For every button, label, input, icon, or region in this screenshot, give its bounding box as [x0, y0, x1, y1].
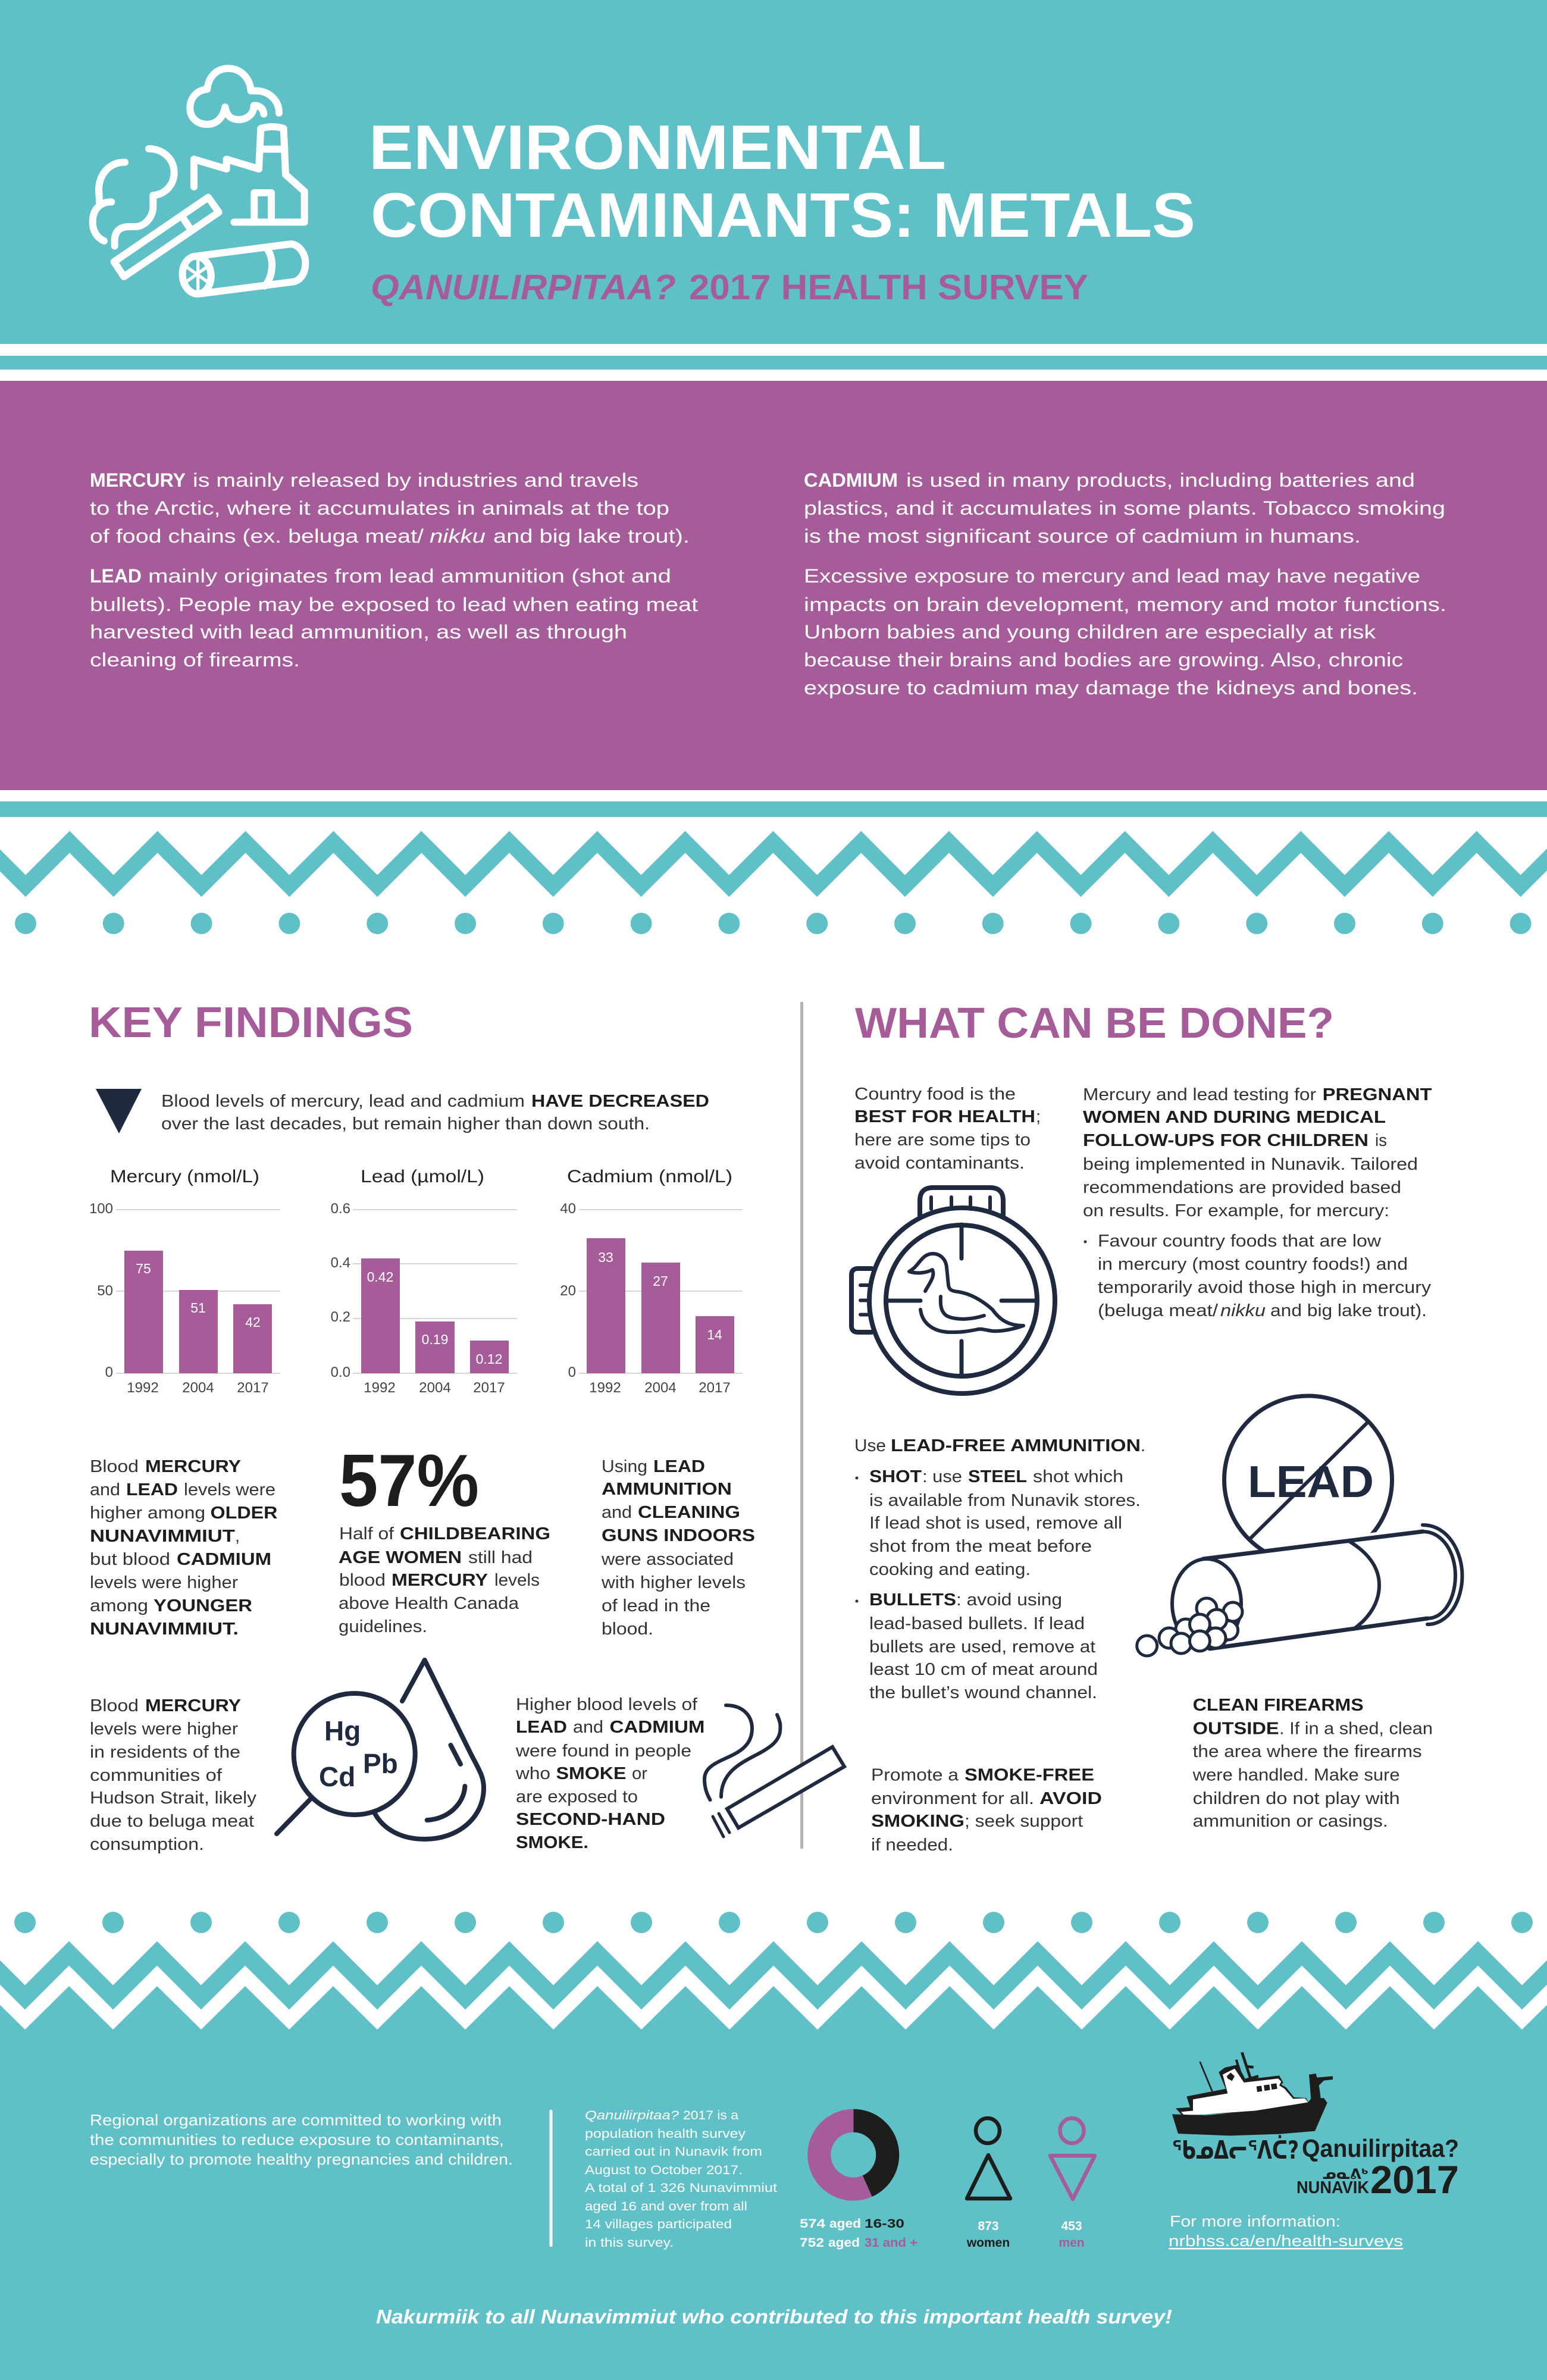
bar chart: mercury: 2017: [237, 1380, 269, 1396]
text: childbearing age women: blood: [339, 1571, 386, 1590]
text: childbearing age women: MERCURY: [392, 1571, 488, 1590]
text: age differences: levels were: [184, 1480, 275, 1499]
text: lead ammunition: with higher levels: [601, 1573, 746, 1592]
text: Hudson Strait: Blood: [90, 1696, 139, 1715]
text: Hudson Strait: consumption.: [90, 1835, 204, 1854]
text: survey description: A total of 1 326 Nunavimmiut: [585, 2181, 777, 2195]
heading: what can be done: WHAT CAN BE DONE?: [855, 1000, 1334, 1047]
text: survey description: Qanuilirpitaa?: [585, 2109, 679, 2122]
counts: women and men: men: [1059, 2236, 1085, 2250]
icon: blood drop with magnifier: [277, 1660, 484, 1839]
text: testing: [1083, 1085, 1432, 1320]
intro text: left column: mainly originates from lead ammunition (shot and: [148, 565, 671, 587]
text: lead ammunition: [601, 1457, 755, 1639]
text: smoking: Higher blood levels of: [516, 1695, 698, 1714]
title: CONTAMINANTS: METALS: [371, 180, 1195, 250]
text: smoking: SMOKE: [556, 1764, 626, 1783]
bar chart: cadmium: 33: [598, 1250, 613, 1265]
text: lead-free ammunition: is available from Nunavik stores.: [869, 1491, 1141, 1510]
bar chart: cadmium: 40: [560, 1201, 576, 1217]
intro text: left column: harvested with lead ammunition, as well as through: [90, 621, 627, 643]
intro text: left column: MERCURY: [90, 469, 186, 491]
text: lead-free ammunition: If lead shot is used, remove all: [869, 1514, 1122, 1533]
bar chart: cadmium: 2004: [644, 1380, 677, 1396]
text: survey description: August to October 2017.: [585, 2163, 743, 2177]
donut legend: 574: [800, 2217, 825, 2231]
text: country food: Country food is the: [854, 1085, 1016, 1104]
text: smoke-free: if needed.: [871, 1836, 953, 1855]
text: lead-free ammunition: [854, 1436, 1145, 1702]
text: clean firearms: the area where the firearms: [1193, 1742, 1422, 1761]
text: age differences: ,: [235, 1527, 240, 1546]
more information link: nrbhss.ca/en/health-surveys: [1169, 2232, 1403, 2250]
intro text: left column: of food chains (ex. beluga meat/: [90, 525, 424, 547]
bar chart: lead: 0.4: [331, 1255, 350, 1271]
bar chart: lead: 2004: [419, 1380, 451, 1396]
intro text: right column: exposure to cadmium may damage the kidneys and bones.: [804, 677, 1418, 699]
decreased statement: over the last decades, but remain higher than down south.: [161, 1114, 650, 1133]
big number: 57%: 57%: [339, 1440, 479, 1522]
text: lead ammunition: LEAD: [653, 1457, 705, 1476]
text: testing: and big lake trout).: [1270, 1301, 1427, 1320]
bar chart: mercury: [89, 1167, 280, 1396]
subtitle: [371, 268, 1088, 307]
icon: downward triangle: [96, 1089, 142, 1133]
text: regional organizations: the communities to reduce exposure to contaminants,: [90, 2131, 504, 2149]
text: survey description: [585, 2109, 777, 2250]
donut legend: 16-30: [865, 2217, 904, 2231]
icon: no lead with shotgun shell: [1137, 1396, 1463, 1656]
icon: smoking cigarette: [704, 1705, 844, 1837]
logo: Qanuilirpitaa 2017: ᖃᓄᐃᓕᕐᐱᑖ?: [1172, 2135, 1299, 2165]
decreased statement: HAVE DECREASED: [531, 1092, 709, 1111]
text: smoke-free: SMOKE-FREE: [964, 1766, 1094, 1785]
text: Hudson Strait: MERCURY: [145, 1696, 241, 1715]
text: survey description: 14 villages participated: [585, 2218, 732, 2231]
bar chart: cadmium: Cadmium (nmol/L): [567, 1167, 732, 1186]
donut legend: aged: [829, 2217, 861, 2231]
counts: women and men: 873: [978, 2219, 999, 2233]
bar chart: lead: 2017: [473, 1380, 505, 1396]
text: lead ammunition: were associated: [601, 1550, 734, 1569]
text: age differences: OLDER: [211, 1504, 278, 1523]
text: lead ammunition: AMMUNITION: [602, 1480, 732, 1499]
text: testing: recommendations are provided based: [1083, 1178, 1401, 1197]
text: age differences: levels were higher: [90, 1573, 238, 1592]
bar chart: mercury: 100: [89, 1201, 113, 1217]
text: lead-free ammunition: Use: [854, 1436, 886, 1455]
intro text: right column: because their brains and bodies are growing. Also, chronic: [804, 649, 1403, 671]
donut legend: aged: [828, 2236, 860, 2250]
text: survey description: aged 16 and over from all: [585, 2200, 747, 2213]
subtitle: 2017 HEALTH SURVEY: [689, 268, 1088, 307]
bar chart: mercury: Mercury (nmol/L): [110, 1167, 259, 1186]
text: regional organizations: especially to promote healthy pregnancies and children.: [90, 2150, 513, 2168]
icon: women: [967, 2118, 1010, 2199]
text: regional organizations: Regional organizations are committed to working with: [90, 2111, 502, 2129]
text: lead-free ammunition: STEEL: [968, 1467, 1027, 1486]
text: lead-free ammunition: SHOT: [869, 1467, 922, 1486]
bar chart: cadmium: 27: [653, 1273, 668, 1289]
text: age differences: Blood: [90, 1457, 139, 1476]
text: smoking: SMOKE.: [516, 1833, 588, 1852]
bar chart: mercury: 1992: [127, 1380, 159, 1396]
text: smoking: are exposed to: [516, 1787, 638, 1806]
intro text: right column: is the most significant source of cadmium in humans.: [804, 525, 1361, 547]
text: Hudson Strait: communities of: [90, 1766, 223, 1785]
text: survey description: carried out in Nunavik from: [585, 2145, 762, 2159]
header band: [0, 0, 1547, 344]
text: testing: in mercury (most country foods!) and: [1098, 1255, 1408, 1274]
counts: women and men: 453: [1061, 2219, 1082, 2233]
donut chart: age groups: [819, 2121, 888, 2189]
icon: blood drop with magnifier: Pb: [363, 1748, 398, 1779]
intro text: right column: [804, 469, 1446, 699]
intro text: right column: CADMIUM: [804, 469, 898, 491]
text: age differences: [90, 1457, 278, 1639]
text: testing: on results. For example, for mercury:: [1083, 1201, 1389, 1220]
text: clean firearms: CLEAN FIREARMS: [1193, 1696, 1364, 1715]
text: childbearing age women: still had: [468, 1548, 533, 1567]
text: childbearing age women: Half of: [339, 1524, 394, 1543]
text: lead ammunition: CLEANING: [638, 1503, 740, 1522]
bar chart: lead: 0.42: [367, 1269, 393, 1285]
decreased statement: Blood levels of mercury, lead and cadmium: [161, 1092, 525, 1111]
bar chart: mercury: 0: [105, 1364, 113, 1380]
text: clean firearms: . If in a shed, clean: [1279, 1720, 1433, 1739]
intro text: left column: nikku: [430, 525, 486, 547]
text: testing: WOMEN AND DURING MEDICAL: [1083, 1108, 1386, 1127]
text: country food: BEST FOR HEALTH: [854, 1107, 1035, 1126]
text: childbearing age women: [339, 1524, 550, 1636]
icon: men: [1050, 2118, 1095, 2199]
text: lead ammunition: of lead in the: [602, 1596, 710, 1615]
icon: blood drop with magnifier: Hg: [324, 1715, 361, 1746]
donut legend: 752: [800, 2236, 824, 2250]
intro text: right column: is used in many products, including batteries and: [906, 469, 1415, 491]
text: Hudson Strait: in residents of the: [90, 1743, 240, 1762]
intro text: left column: is mainly released by industries and travels: [193, 469, 638, 491]
text: childbearing age women: guidelines.: [339, 1617, 427, 1636]
title: ENVIRONMENTAL: [369, 112, 946, 183]
panel: intro: [0, 381, 1547, 790]
text: lead-free ammunition: cooking and eating.: [869, 1560, 1031, 1579]
logo: Qanuilirpitaa 2017: [1172, 2134, 1459, 2202]
text: Hudson Strait: [90, 1696, 257, 1854]
text: smoking: who: [515, 1764, 550, 1783]
bar chart: lead: 0.0: [331, 1364, 350, 1380]
icon: rifle scope with duck: [851, 1188, 1055, 1393]
header icon: smoke, factory, cigarette, shotgun shell: [93, 68, 305, 295]
bar chart: mercury: 50: [97, 1283, 113, 1299]
text: survey description: in this survey.: [585, 2236, 674, 2250]
text: testing: temporarily avoid those high in mercury: [1098, 1278, 1432, 1297]
text: testing: FOLLOW-UPS FOR CHILDREN: [1083, 1131, 1368, 1150]
counts: women and men: [966, 2219, 1085, 2250]
text: Hudson Strait: levels were higher: [90, 1720, 238, 1739]
text: testing: Mercury and lead testing for: [1083, 1085, 1316, 1104]
text: age differences: YOUNGER: [154, 1596, 252, 1615]
text: country food: ;: [1036, 1107, 1041, 1126]
decreased statement: [161, 1092, 709, 1133]
bar chart: cadmium: [560, 1167, 743, 1396]
text: testing: is: [1375, 1131, 1387, 1150]
intro text: left column: LEAD: [90, 565, 142, 587]
text: smoke-free: SMOKING: [871, 1812, 964, 1831]
intro text: left column: bullets). People may be exposed to lead when eating meat: [90, 594, 698, 615]
intro text: left column: to the Arctic, where it accumulates in animals at the top: [90, 497, 669, 519]
bar chart: cadmium: 20: [560, 1283, 576, 1299]
text: survey description: population health survey: [585, 2127, 746, 2141]
logo: Qanuilirpitaa 2017: NUNAVIK: [1297, 2178, 1369, 2197]
text: lead-free ammunition: least 10 cm of meat around: [869, 1660, 1098, 1679]
bar chart: lead: 0.2: [331, 1309, 350, 1325]
text: smoking: or: [632, 1764, 647, 1783]
logo: Qanuilirpitaa 2017: 2017: [1370, 2157, 1459, 2202]
text: testing: being implemented in Nunavik. Tailored: [1083, 1155, 1418, 1174]
intro text: left column: cleaning of firearms.: [90, 649, 300, 671]
more information link: [1169, 2212, 1403, 2250]
bar chart: cadmium: 0: [568, 1364, 576, 1380]
text: smoke-free: [871, 1766, 1102, 1855]
text: clean firearms: ammunition or casings.: [1193, 1812, 1388, 1831]
text: smoke-free: AVOID: [1039, 1789, 1102, 1808]
counts: women and men: women: [966, 2236, 1010, 2250]
bar chart: cadmium: 2017: [699, 1380, 731, 1396]
text: testing: Favour country foods that are low: [1098, 1232, 1382, 1251]
text: childbearing age women: levels: [494, 1571, 540, 1590]
text: lead-free ammunition: the bullet’s wound channel.: [869, 1683, 1097, 1702]
text: lead-free ammunition: : avoid using: [956, 1590, 1062, 1609]
text: lead-free ammunition: BULLETS: [869, 1590, 956, 1609]
text: clean firearms: [1192, 1696, 1433, 1831]
bar chart: lead: 0.6: [331, 1201, 350, 1217]
text: lead ammunition: Using: [602, 1457, 647, 1476]
text: smoking: CADMIUM: [609, 1718, 704, 1737]
text: lead-free ammunition: bullets are used, remove at: [869, 1637, 1095, 1656]
text: lead-free ammunition: .: [1141, 1436, 1145, 1455]
text: age differences: but blood: [90, 1550, 170, 1569]
intro text: left column: and big lake trout).: [493, 525, 690, 547]
text: clean firearms: OUTSIDE: [1193, 1720, 1279, 1739]
bar chart: mercury: 51: [190, 1300, 206, 1316]
text: smoke-free: environment for all.: [871, 1789, 1034, 1808]
heading: key findings: KEY FINDINGS: [89, 999, 413, 1047]
logo: ship: [1172, 2052, 1333, 2135]
text: childbearing age women: above Health Canada: [339, 1594, 519, 1613]
text: lead-free ammunition: shot from the meat before: [869, 1537, 1092, 1556]
text: testing: nikku: [1220, 1301, 1266, 1320]
bar chart: lead: 0.19: [422, 1332, 448, 1347]
bar chart: cadmium: 1992: [589, 1380, 621, 1396]
text: smoking: LEAD: [516, 1718, 567, 1737]
bar chart: lead: 1992: [364, 1380, 396, 1396]
icon: no lead with shotgun shell: LEAD: [1248, 1457, 1374, 1507]
text: regional organizations: [90, 2111, 513, 2168]
bar chart: mercury: 42: [245, 1314, 261, 1330]
text: age differences: CADMIUM: [177, 1550, 271, 1569]
text: lead-free ammunition: lead-based bullets. If lead: [869, 1614, 1085, 1633]
text: age differences: NUNAVIMMIUT.: [90, 1620, 239, 1639]
text: smoking: were found in people: [515, 1742, 691, 1761]
text: Hudson Strait: due to beluga meat: [90, 1812, 254, 1831]
text: country food: avoid contaminants.: [854, 1154, 1025, 1173]
text: smoke-free: Promote a: [871, 1766, 959, 1785]
logo: Qanuilirpitaa 2017: Qanuilirpitaa?: [1302, 2134, 1459, 2162]
title: [369, 112, 1195, 250]
text: smoking: SECOND-HAND: [516, 1810, 665, 1829]
bar chart: lead: Lead (µmol/L): [361, 1167, 484, 1186]
text: testing: (beluga meat/: [1098, 1301, 1219, 1320]
more information link: For more information:: [1170, 2212, 1341, 2230]
logo: Qanuilirpitaa 2017: ᓄᓇᕕᒃ: [1323, 2166, 1368, 2182]
text: lead ammunition: GUNS INDOORS: [602, 1526, 755, 1545]
text: age differences: higher among: [90, 1504, 205, 1523]
bar chart: lead: 0.12: [476, 1351, 502, 1367]
intro text: left column: [90, 469, 698, 671]
text: age differences: LEAD: [126, 1480, 178, 1499]
text: clean firearms: children do not play with: [1193, 1789, 1400, 1808]
bar chart: mercury: 75: [136, 1261, 151, 1276]
text: smoke-free: ; seek support: [964, 1812, 1083, 1831]
text: age differences: among: [90, 1596, 148, 1615]
text: age differences: MERCURY: [145, 1457, 241, 1476]
text: country food: [854, 1085, 1041, 1173]
donut legend: [800, 2217, 917, 2250]
footer panel: [0, 1986, 1547, 2380]
text: lead-free ammunition: shot which: [1033, 1467, 1123, 1486]
text: smoking: [515, 1695, 704, 1852]
text: lead-free ammunition: LEAD-FREE AMMUNITION: [891, 1436, 1141, 1455]
intro text: right column: impacts on brain development, memory and motor functions.: [804, 594, 1446, 615]
donut legend: 31 and +: [865, 2236, 917, 2250]
text: lead ammunition: and: [602, 1503, 632, 1522]
intro text: right column: plastics, and it accumulates in some plants. Tobacco smoking: [804, 497, 1445, 519]
text: clean firearms: were handled. Make sure: [1192, 1766, 1400, 1785]
thank-you message: Nakurmiik to all Nunavimmiut who contributed to this important health survey!: [376, 2306, 1172, 2328]
intro text: right column: Unborn babies and young children are especially at risk: [804, 621, 1376, 643]
bar chart: lead: [331, 1167, 517, 1396]
text: smoking: and: [573, 1718, 603, 1737]
text: Hudson Strait: Hudson Strait, likely: [90, 1789, 257, 1808]
text: survey description: 2017 is a: [683, 2109, 738, 2122]
text: childbearing age women: AGE WOMEN: [339, 1548, 462, 1567]
subtitle: QANUILIRPITAA?: [371, 268, 676, 307]
text: childbearing age women: CHILDBEARING: [400, 1524, 550, 1543]
text: testing: PREGNANT: [1323, 1085, 1432, 1104]
icon: blood drop with magnifier: Cd: [319, 1761, 355, 1792]
text: lead ammunition: blood.: [602, 1620, 653, 1639]
bar chart: cadmium: 14: [707, 1327, 722, 1342]
text: country food: here are some tips to: [854, 1130, 1031, 1150]
text: lead-free ammunition: : use: [922, 1467, 962, 1486]
text: age differences: and: [90, 1480, 120, 1499]
bar chart: mercury: 2004: [182, 1380, 214, 1396]
text: age differences: NUNAVIMMIUT: [90, 1527, 235, 1546]
intro text: right column: Excessive exposure to mercury and lead may have negative: [804, 565, 1420, 587]
